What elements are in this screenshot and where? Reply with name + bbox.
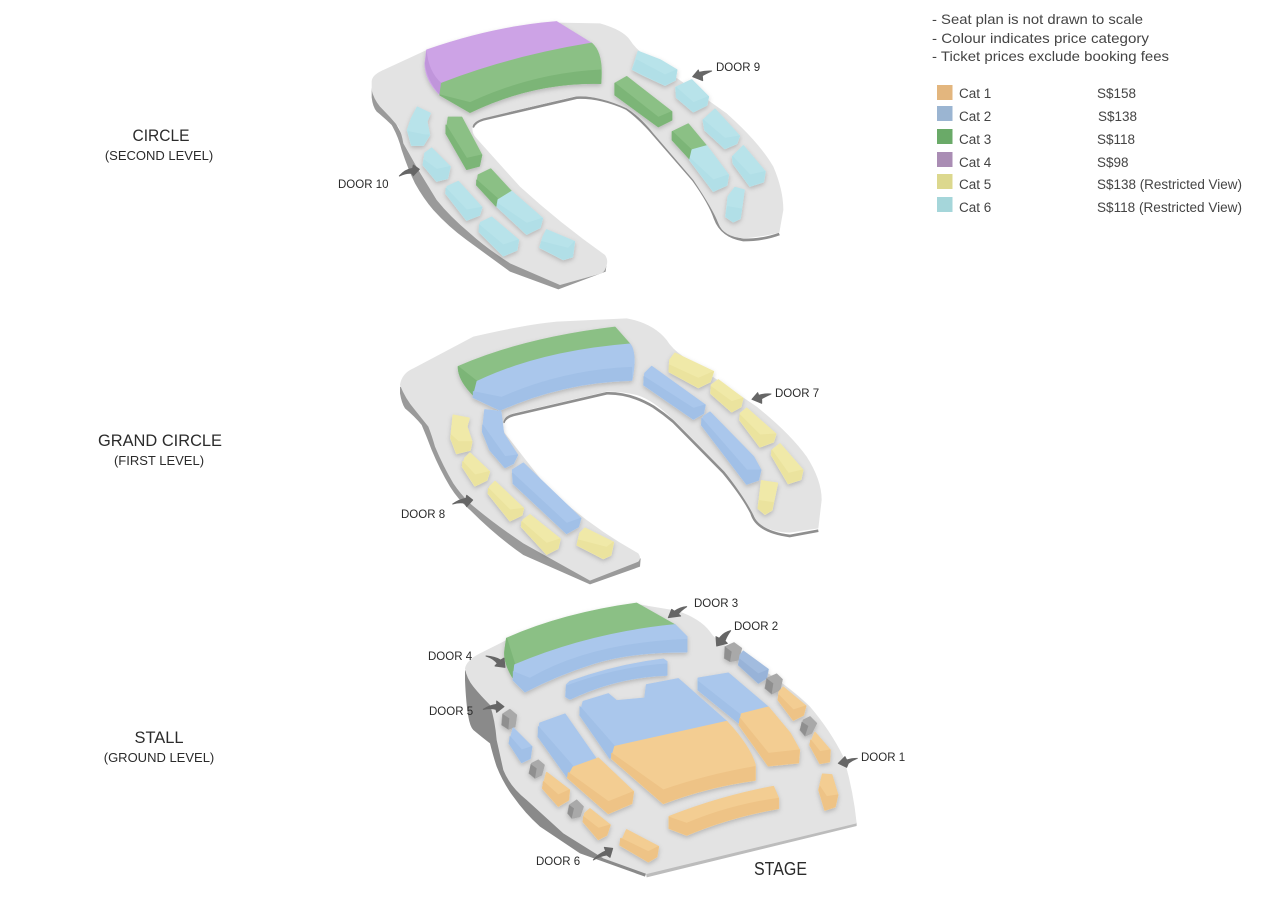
cat 5 block: [463, 453, 489, 486]
panel: grand circle seating plan: [400, 318, 822, 584]
cat 1 left block: [568, 758, 633, 813]
cat 3 green central block: [458, 327, 630, 395]
cat 1 small block: [819, 774, 838, 810]
cat 6 block: [703, 109, 739, 148]
notes: [932, 11, 1169, 64]
arrow: door 10: [399, 165, 419, 176]
stage edge: [646, 823, 857, 877]
cat 2 block: [513, 463, 581, 533]
legend: cat 3: S$118: [1097, 132, 1135, 147]
cat 6 block: [479, 217, 518, 256]
cat 6 block: [408, 107, 430, 145]
floor edge shadow: [372, 88, 607, 289]
level label: stall: (GROUND LEVEL): [104, 750, 214, 765]
label: door 6: DOOR 6: [536, 856, 580, 868]
grey pillar: [724, 643, 742, 662]
cat 5 block: [758, 481, 777, 514]
level label: grand circle: (FIRST LEVEL): [114, 453, 204, 468]
legend: cat 1: Cat 1: [959, 86, 991, 101]
cat 6 block: [446, 182, 482, 220]
grey pillar: [765, 674, 782, 694]
label: stage: STAGE: [754, 859, 807, 879]
cat 3 green block: [505, 603, 675, 677]
cat 6 block: [733, 146, 765, 186]
label: door 4: DOOR 4: [428, 651, 473, 663]
level label: grand circle: GRAND CIRCLE: [98, 431, 222, 450]
level label: circle: (SECOND LEVEL): [105, 148, 213, 163]
floor of circle: [372, 23, 783, 285]
cat 6 block: [423, 148, 450, 181]
cat 1 small block: [583, 809, 610, 839]
legend: cat 4: S$98: [1097, 155, 1129, 170]
cat 1 small block: [778, 687, 806, 720]
seat blocks: [408, 22, 765, 259]
arrow: door 3: [668, 607, 687, 618]
legend: cat 4: [937, 152, 1129, 170]
cat 5 block: [772, 444, 803, 483]
arrow: door 1: [838, 757, 857, 767]
cat 5 block: [451, 415, 472, 453]
cat 3 green central block: [440, 43, 601, 112]
floor of stall: [465, 604, 857, 874]
cat 3 block: [615, 77, 672, 127]
inner rim of circle floor: [473, 98, 779, 240]
cat 1 front block: [669, 787, 778, 835]
label: door 7: DOOR 7: [775, 388, 819, 400]
cat 2 right block: [698, 673, 768, 723]
legend: cat 3: [937, 129, 1135, 147]
cat 6 block: [540, 230, 574, 259]
floor edge shadow: [400, 387, 641, 584]
cat 2 block: [702, 412, 761, 484]
level label: stall: [104, 728, 214, 765]
cat 5 block: [522, 515, 560, 554]
label: door 3: DOOR 3: [694, 598, 738, 610]
cat 5 block: [711, 380, 743, 412]
label: door 10: DOOR 10: [338, 179, 388, 191]
cat 1 small block: [543, 773, 569, 806]
legend: cat 3: Cat 3: [959, 132, 991, 147]
legend: [937, 85, 1242, 215]
cat 2 curved block: [566, 659, 667, 699]
notes: - Colour indicates price category: [932, 30, 1149, 46]
cat 5 block: [740, 408, 776, 447]
legend: cat 1: S$158: [1097, 86, 1136, 101]
cat 1 small block: [810, 733, 830, 763]
floor of grand circle: [400, 318, 822, 581]
cat 5 block: [669, 353, 713, 387]
grey pillar: [568, 800, 583, 818]
legend: cat 1: [937, 85, 1136, 101]
seat blocks: [451, 327, 803, 558]
arrow: door 6: [593, 847, 613, 860]
legend: cat 6: S$118 (Restricted View): [1097, 200, 1242, 215]
arrow: door 8: [453, 495, 473, 507]
cat 6 block: [497, 192, 542, 234]
legend: cat 6: Cat 6: [959, 200, 991, 215]
legend: cat 6: [937, 197, 1242, 215]
legend: cat 2: Cat 2: [959, 109, 991, 124]
cat 1 right block: [739, 707, 799, 766]
inner rim of grand circle floor: [503, 393, 818, 536]
level label: circle: CIRCLE: [132, 126, 190, 145]
cat 6 block: [676, 80, 708, 112]
cat 2 block: [483, 410, 517, 467]
cat 5 block: [488, 482, 523, 521]
legend: cat 5: Cat 5: [959, 177, 991, 192]
seat blocks: [502, 603, 838, 862]
cat 6 block: [633, 52, 677, 85]
level label: circle: [105, 126, 213, 163]
label: door 8: DOOR 8: [401, 509, 445, 521]
notes: - Ticket prices exclude booking fees: [932, 48, 1169, 64]
panel: circle seating plan: [372, 22, 783, 289]
legend: cat 2: S$138: [1098, 109, 1137, 124]
arrow: door 7: [752, 393, 771, 403]
label: door 2: DOOR 2: [734, 621, 778, 633]
cat 2 small block: [738, 651, 768, 683]
grey pillar: [529, 760, 544, 778]
arrow: door 5: [483, 701, 504, 712]
floor edge shadow: [465, 670, 647, 877]
cat 3 block: [672, 124, 707, 159]
legend: cat 5: [937, 174, 1242, 192]
cat 2 left block: [538, 714, 596, 778]
cat 3 block: [446, 117, 482, 169]
label: door 9: DOOR 9: [716, 62, 760, 74]
cat 1 centre block: [612, 722, 755, 803]
cat 2 blue central block: [473, 344, 634, 410]
legend: cat 5: S$138 (Restricted View): [1097, 177, 1242, 192]
label: door 5: DOOR 5: [429, 706, 473, 718]
cat 5 block: [577, 528, 613, 558]
cat 3 block: [477, 169, 512, 206]
level label: grand circle: [98, 431, 222, 468]
notes: - Seat plan is not drawn to scale: [932, 11, 1143, 27]
cat 1 small block: [620, 830, 658, 862]
legend: cat 2: [937, 106, 1137, 124]
cat 2 rear blue block: [513, 625, 687, 692]
grey pillar: [800, 717, 817, 736]
label: door 1: DOOR 1: [861, 752, 905, 764]
panel: stall seating plan: [465, 603, 857, 877]
cat 4 purple block: [425, 22, 592, 95]
legend: cat 4: Cat 4: [959, 155, 992, 170]
cat 6 block: [726, 188, 744, 222]
cat 6 block: [690, 146, 728, 191]
cat 2 block: [644, 367, 705, 419]
arrow: door 2: [716, 631, 731, 646]
arrow: door 4: [486, 656, 505, 667]
level label: stall: STALL: [134, 728, 184, 747]
cat 2 centre block: [580, 679, 727, 758]
arrow: door 9: [693, 70, 712, 81]
cat 2 small block: [509, 728, 532, 762]
grey pillar: [502, 709, 517, 729]
